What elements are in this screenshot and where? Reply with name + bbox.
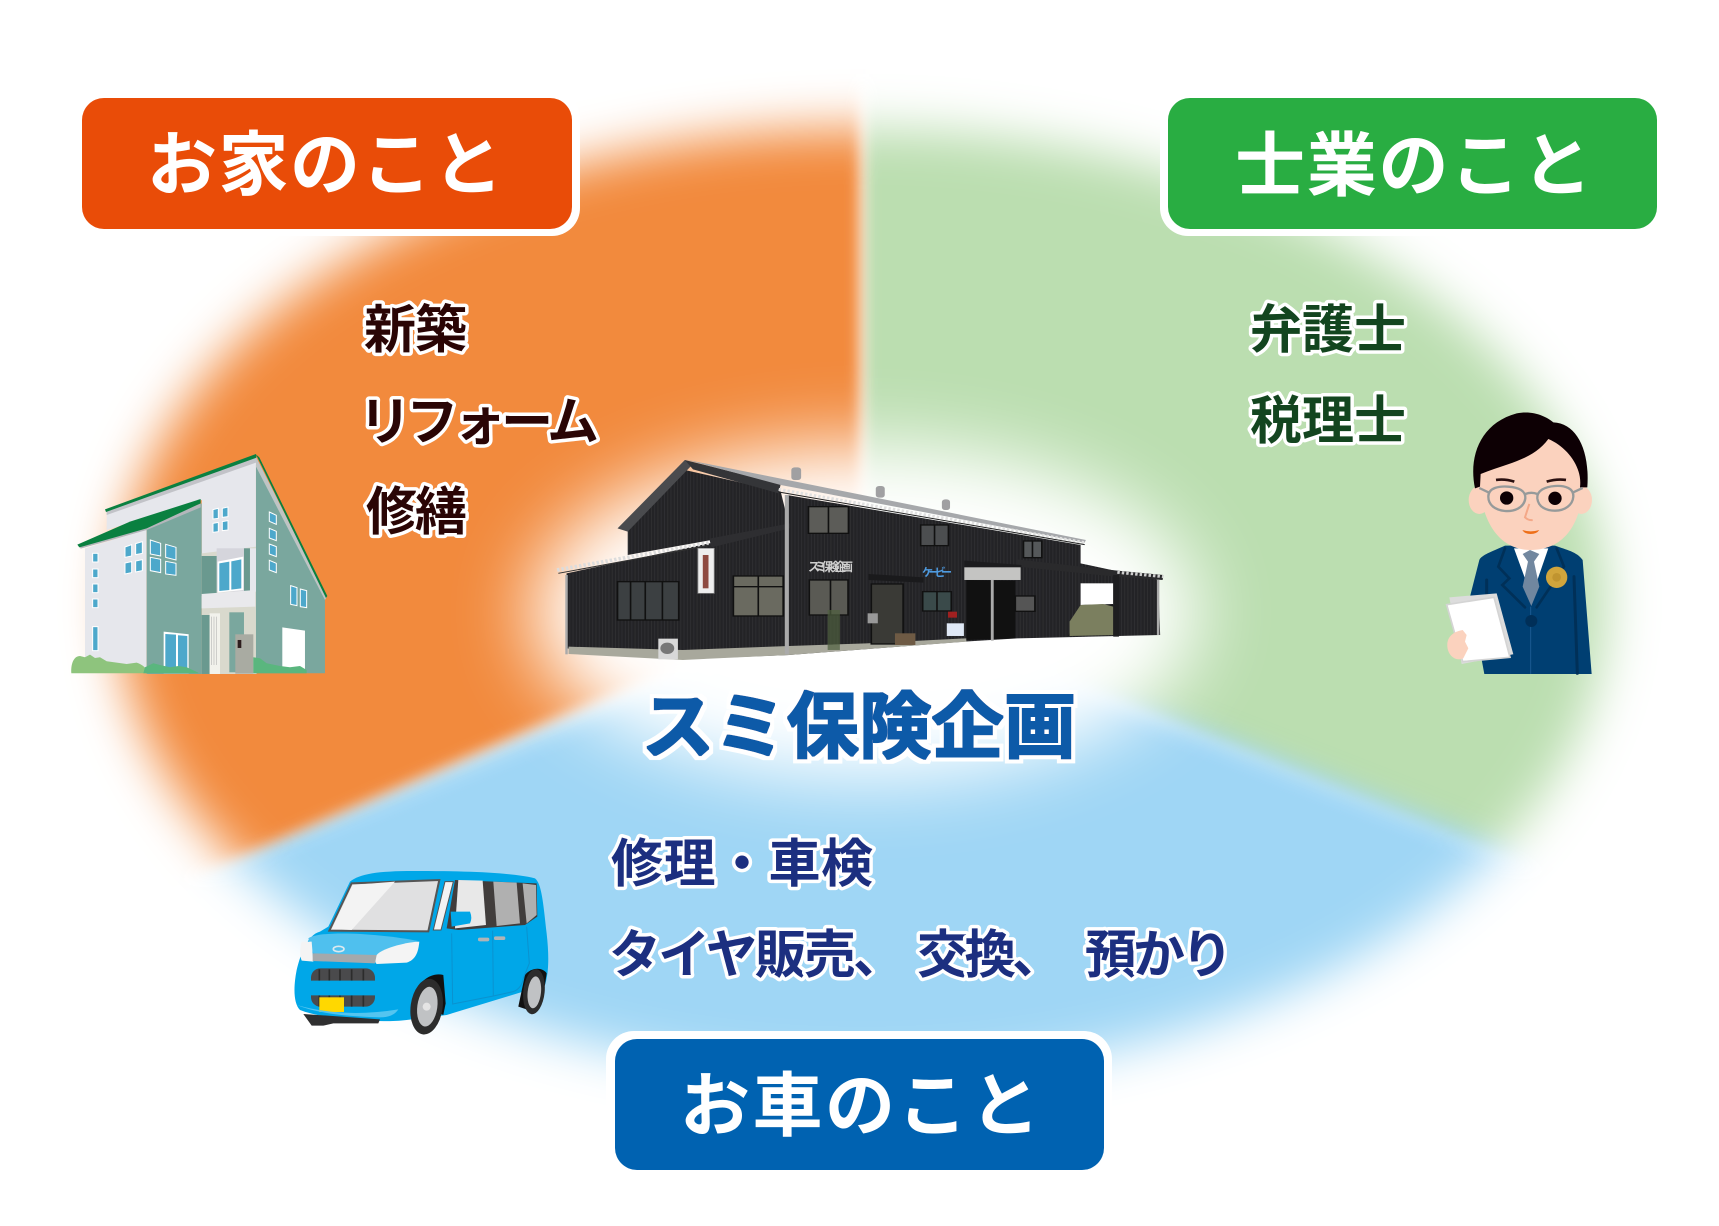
text block: house services: リフォーム [359, 394, 599, 452]
icon: businessman illustration [1447, 412, 1592, 674]
text block: trades services [1250, 302, 1406, 451]
button: お車のこと [606, 1031, 1112, 1177]
text block: house services: 修繕 [366, 484, 467, 542]
text block: house services [359, 302, 599, 542]
background: blurred three-sector ellipse [78, 88, 1636, 1082]
button: 士業のこと: 士業のこと [1235, 127, 1592, 205]
text block: car services: タイヤ販売、 [609, 927, 905, 985]
text block: car services [609, 836, 1233, 985]
sector: house (orange) [78, 88, 870, 873]
title: スミ保険企画: スミ保険企画 [642, 688, 1076, 768]
icon: blue car illustration [294, 871, 548, 1037]
text block: car services: 修理・車検 [611, 836, 873, 894]
text block: trades services: 弁護士 [1250, 302, 1406, 360]
sector: car (blue) [212, 692, 1519, 1082]
sector: trades (green) [860, 99, 1636, 855]
text block: house services: 新築 [364, 302, 467, 360]
icon: house illustration [71, 454, 327, 674]
text block: trades services: 税理士 [1250, 393, 1406, 451]
text block: car services: 交換、 [917, 927, 1064, 985]
button: お家のこと [76, 90, 580, 236]
icon: office building photo [557, 459, 1163, 660]
white central glow [530, 444, 1200, 780]
text block: car services: 預かり [1085, 927, 1233, 985]
sign text on wall: スミ保険企画: スミ保険企画 [808, 559, 853, 574]
button: お車のこと: お車のこと [680, 1067, 1040, 1145]
sign text on wall: ケービー: ケービー [922, 565, 952, 579]
button: 士業のこと [1160, 90, 1657, 236]
button: お家のこと: お家のこと [147, 126, 503, 204]
